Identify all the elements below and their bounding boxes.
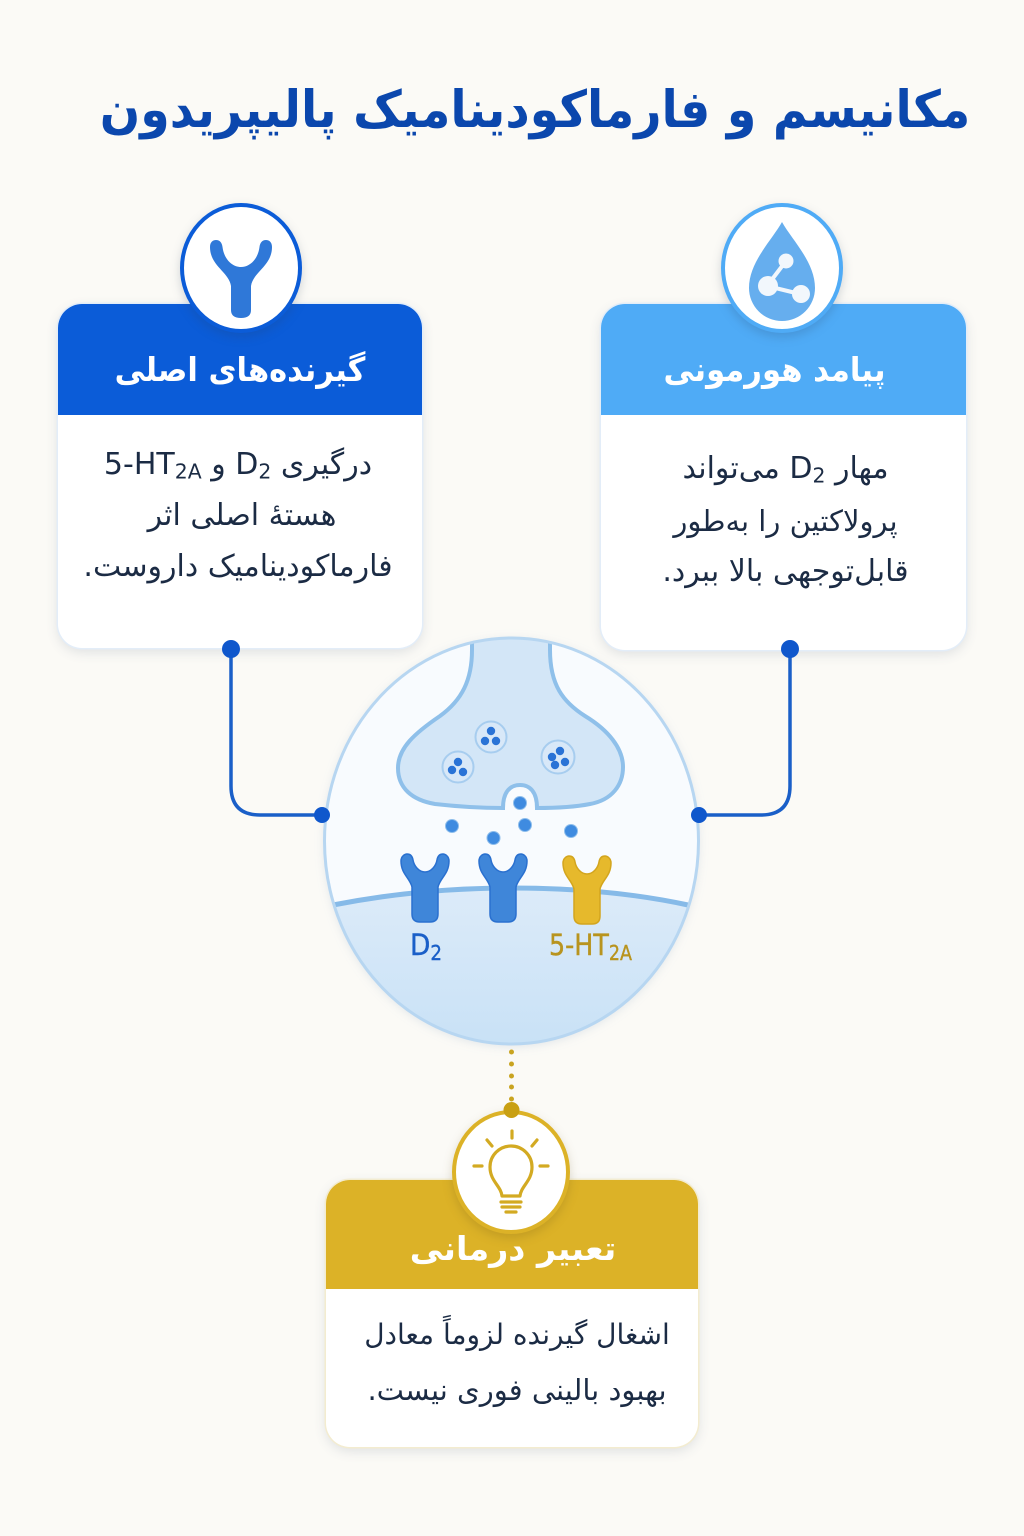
panel: hormonal signal bbox=[597, 203, 970, 658]
label: 5-HT2A: 5-HT bbox=[549, 928, 617, 962]
label: D2: D bbox=[410, 928, 432, 962]
panel card bbox=[601, 304, 966, 650]
postsynaptic membrane bbox=[336, 890, 686, 1042]
body text: therapeutic interpretation: اشغال گیرنده لزوماً معادل bbox=[364, 1318, 670, 1351]
panel: therapeutic interpretation bbox=[322, 1110, 702, 1455]
panel card bbox=[58, 304, 422, 648]
panel card bbox=[326, 1180, 698, 1447]
body text: hormonal signal: پرولاکتین را به‌طور bbox=[673, 504, 898, 538]
receptor: D2 second bbox=[479, 854, 527, 922]
panel header band bbox=[601, 304, 966, 415]
panel header band bbox=[326, 1180, 698, 1289]
body text: primary receptors: فارماکودینامیک داروست. bbox=[83, 549, 393, 584]
heading: therapeutic interpretation: تعبیر درمانی bbox=[410, 1229, 616, 1268]
body text: primary receptors bbox=[83, 447, 393, 584]
icon: hormone drop bbox=[717, 203, 847, 340]
body text: therapeutic interpretation bbox=[364, 1314, 670, 1408]
synaptic vesicles bbox=[442, 722, 574, 782]
panel: primary receptors bbox=[54, 203, 426, 656]
body text: primary receptors: هستهٔ اصلی اثر bbox=[148, 498, 336, 533]
body text: hormonal signal bbox=[662, 451, 909, 589]
icon: receptor bbox=[176, 203, 306, 339]
icon: light bulb bbox=[448, 1110, 574, 1240]
body text: hormonal signal: مهار D2 می‌تواند bbox=[682, 451, 889, 487]
label: D2: 2 bbox=[430, 941, 442, 965]
body text: hormonal signal: قابل‌توجهی بالا ببرد. bbox=[662, 554, 909, 589]
neurotransmitter molecules bbox=[446, 796, 578, 844]
presynaptic terminal bbox=[398, 630, 623, 808]
title: مکانیسم و فارماکودینامیک پالیپریدون bbox=[100, 81, 970, 140]
receptor: 5-HT2A bbox=[563, 856, 611, 924]
body text: primary receptors: درگیری D2 و 5-HT2A bbox=[104, 447, 372, 483]
panel: synapse diagram bbox=[322, 636, 702, 1049]
heading: hormonal signal: پیامد هورمونی bbox=[663, 350, 885, 389]
receptor: D2 bbox=[401, 854, 449, 922]
body text: therapeutic interpretation: بهبود بالینی فوری نیست. bbox=[367, 1373, 667, 1407]
heading: primary receptors: گیرنده‌های اصلی bbox=[115, 350, 365, 389]
label: 5-HT2A: 2A bbox=[609, 941, 632, 965]
panel header band bbox=[58, 304, 422, 415]
